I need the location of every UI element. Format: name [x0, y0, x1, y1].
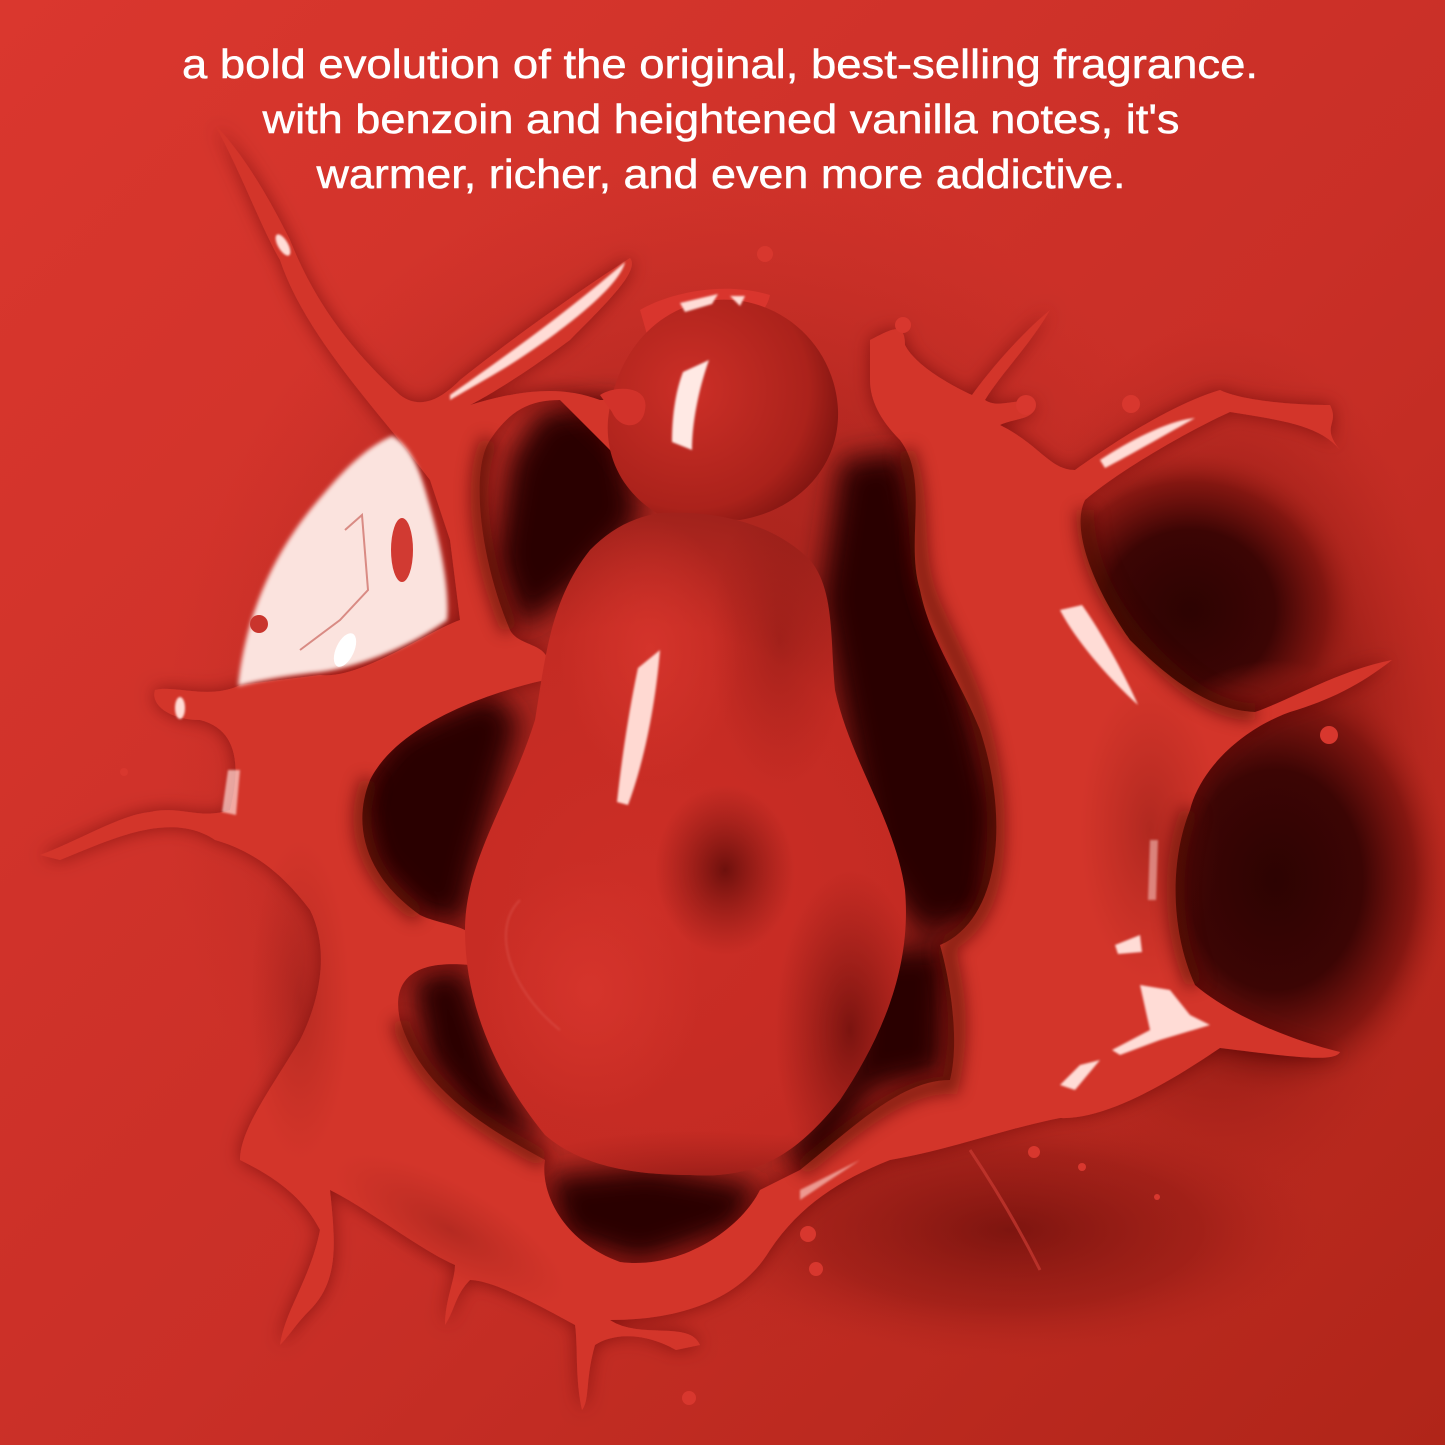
tagline: with benzoin and heightened vanilla notes, it's: [261, 96, 1180, 142]
tagline: warmer, richer, and even more addictive.: [315, 151, 1126, 197]
soft inner edge shadows: [362, 440, 1255, 1170]
bottle body: [465, 516, 906, 1176]
white reflection pool: [238, 436, 448, 686]
droplets: [120, 246, 1338, 1405]
tagline: a bold evolution of the original, best-selling fragrance.: [182, 41, 1258, 87]
dark outer pockets on the right: [1020, 450, 1445, 1100]
body contour sheen: [506, 900, 560, 1030]
soft folds in the crown: [250, 680, 1220, 1334]
gloss highlights on the splash: [175, 232, 1210, 1200]
rim highlight: [680, 294, 745, 312]
drip over cap: [600, 389, 645, 425]
bottle cap: [600, 294, 838, 520]
splash: upper rim around cap: [640, 289, 770, 345]
thin filament: [970, 1150, 1040, 1270]
tagline: [182, 41, 1258, 197]
body shading: [542, 552, 902, 1176]
shadow halo around the splash: [160, 160, 1445, 1360]
cap highlight: [672, 360, 709, 450]
body main highlight: [617, 650, 660, 805]
dark cavity: [350, 400, 1000, 1265]
